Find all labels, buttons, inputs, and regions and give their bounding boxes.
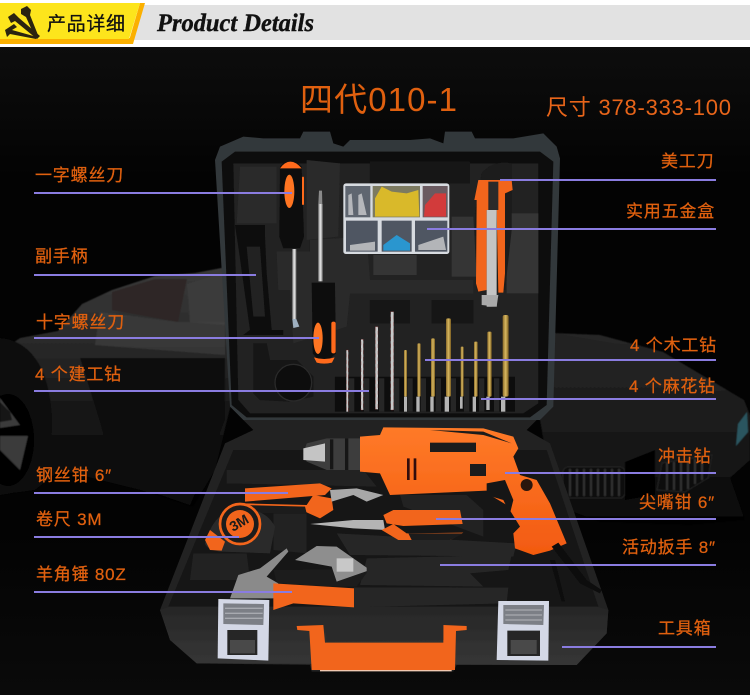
heading: 产品详细: 产品详细 — [47, 13, 125, 35]
label: 冲击钻: 冲击钻 — [658, 447, 711, 466]
label: 副手柄: 副手柄 — [35, 247, 88, 266]
label: 卷尺 3M: 卷尺 3M — [36, 510, 102, 529]
icon: crossed tools — [5, 6, 40, 39]
headlight — [736, 412, 748, 446]
round knob — [253, 343, 313, 402]
twist drill bits — [404, 315, 509, 412]
heading: Product Details: Product Details — [156, 10, 314, 37]
claw hammer — [230, 548, 508, 610]
long nose pliers — [310, 510, 463, 540]
drill rack — [335, 377, 515, 412]
wheel — [0, 394, 34, 486]
label: 一字螺丝刀: 一字螺丝刀 — [35, 166, 124, 185]
car: left side — [0, 266, 232, 507]
label: 实用五金盒: 实用五金盒 — [626, 202, 715, 221]
label: 4 个木工钻: 4 个木工钻 — [630, 336, 717, 355]
label: 工具箱: 工具箱 — [658, 619, 711, 638]
header band — [0, 0, 750, 47]
adjustable wrench — [273, 546, 512, 587]
label: 羊角锤 80Z: 羊角锤 80Z — [36, 565, 127, 584]
front handle — [297, 620, 467, 671]
size note: 尺寸 378-333-100 — [546, 95, 731, 120]
label: 4 个麻花钻: 4 个麻花钻 — [629, 377, 716, 396]
car: right side — [540, 333, 750, 525]
combination pliers — [243, 483, 383, 518]
side handle — [235, 225, 283, 335]
grille right — [657, 455, 712, 492]
hardware box — [343, 183, 449, 254]
tape measure: 3M — [227, 511, 251, 534]
label: 尖嘴钳 6": 尖嘴钳 6″ — [639, 493, 715, 512]
drill — [303, 427, 602, 602]
label: 美工刀: 美工刀 — [661, 152, 714, 171]
grille left — [563, 467, 625, 498]
metal latch: left — [218, 599, 269, 661]
toolbox: upper lid — [215, 132, 560, 420]
toolbox: lower case — [160, 420, 608, 672]
tape measure — [205, 504, 275, 553]
utility knife — [474, 163, 513, 307]
flat screwdriver — [279, 161, 304, 328]
label: 钢丝钳 6": 钢丝钳 6″ — [36, 466, 112, 485]
label: 活动扳手 8": 活动扳手 8″ — [622, 538, 716, 557]
metal latch: right — [497, 601, 549, 661]
label: 4 个建工钻: 4 个建工钻 — [35, 365, 122, 384]
title: 四代010-1 — [300, 81, 457, 118]
masonry drill bits — [346, 312, 394, 412]
phillips screwdriver — [312, 191, 336, 364]
label: 十字螺丝刀: 十字螺丝刀 — [36, 313, 125, 332]
